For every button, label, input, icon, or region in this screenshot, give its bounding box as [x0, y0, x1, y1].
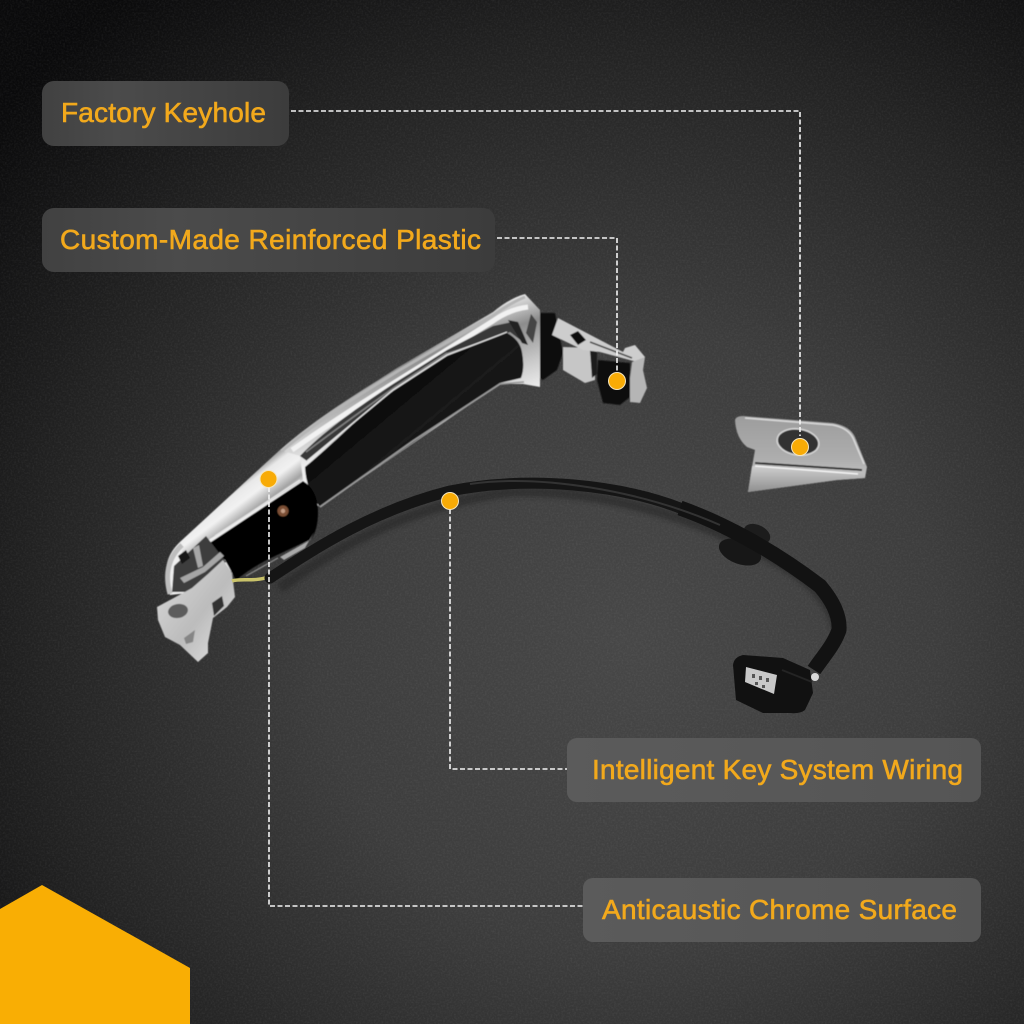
pivot clip chrome — [157, 560, 235, 662]
screw — [278, 506, 288, 516]
black cable — [270, 483, 680, 578]
marker dot: chrome surface — [260, 470, 277, 488]
dashed leader: Factory Keyhole — [291, 111, 800, 436]
callout: Intelligent Key System Wiring — [567, 738, 981, 802]
icon: door handle with chrome surface — [157, 294, 647, 662]
left end chrome ribs — [180, 545, 224, 583]
pocket top edge line — [215, 480, 300, 536]
connector pins — [752, 674, 769, 688]
marker dot: reinforced plastic — [608, 372, 626, 390]
yellow wire — [232, 577, 268, 581]
left end interior — [172, 536, 226, 592]
callout: Anticaustic Chrome Surface — [583, 878, 981, 942]
black cable sleeve — [680, 508, 839, 670]
connector metal clip — [811, 673, 819, 681]
black grip insert — [305, 333, 523, 507]
cover body — [735, 416, 867, 492]
black bezel at right end — [540, 313, 563, 380]
right chrome reflection — [526, 314, 537, 343]
black bracket tab — [597, 360, 630, 405]
chrome bracket block dark slot — [590, 350, 597, 378]
left end dark recess — [178, 550, 190, 564]
cover groove highlight — [755, 466, 858, 474]
pocket lower chrome lip — [280, 532, 314, 560]
callout: Factory Keyhole: Factory Keyhole — [61, 97, 266, 128]
chrome end post — [630, 357, 647, 403]
icon: keyhole cover — [735, 416, 867, 492]
keyhole recess — [775, 426, 821, 458]
pivot clip window — [212, 596, 224, 616]
callout: Anticaustic Chrome Surface: Anticaustic Chrome Surface — [602, 894, 957, 925]
icon: wiring harness — [232, 481, 839, 713]
callout: Custom-Made Reinforced Plastic: Custom-Made Reinforced Plastic — [60, 224, 481, 255]
callout: Factory Keyhole — [42, 81, 289, 146]
black screw pocket — [205, 481, 318, 580]
strip sheen — [306, 353, 447, 452]
grip lower edge — [320, 382, 524, 507]
dashed leader: Anticaustic Chrome Surface — [269, 487, 583, 906]
chrome rim shade — [282, 297, 525, 451]
reflection at grip corner — [508, 320, 528, 345]
pocket lower line — [246, 558, 278, 576]
pivot clip notch — [184, 630, 195, 644]
left end outer rim — [168, 545, 182, 594]
grip top white trim — [307, 332, 507, 461]
connector housing ridge — [782, 670, 812, 682]
callout: Custom-Made Reinforced Plastic — [42, 208, 495, 272]
upper grommet — [741, 520, 773, 548]
connector white terminal block — [745, 667, 777, 694]
corner hexagon accent — [0, 885, 190, 1024]
lower grommet — [715, 533, 765, 571]
cable sheen — [470, 481, 720, 525]
pivot clip hole — [167, 602, 189, 620]
marker dot: wiring — [442, 492, 458, 510]
cover rim light — [745, 418, 864, 464]
chrome bracket top plate — [552, 318, 645, 362]
dark inset strip — [300, 322, 523, 461]
marker dot: keyhole — [792, 438, 808, 456]
chrome handle body — [166, 294, 540, 595]
dashed leader: Intelligent Key System Wiring — [450, 509, 567, 769]
cable shadow — [280, 492, 836, 630]
bracket dark line — [590, 342, 632, 358]
cover lower lip — [748, 466, 865, 492]
chrome bracket block — [563, 347, 595, 383]
bracket slot — [570, 331, 586, 345]
cover groove — [755, 463, 862, 470]
chrome rim highlight — [292, 307, 528, 450]
wide chrome band near pivot — [180, 450, 303, 556]
electrical connector — [733, 655, 813, 713]
dashed leader: Custom-Made Reinforced Plastic — [497, 238, 617, 372]
screw centre — [281, 509, 285, 513]
callout: Intelligent Key System Wiring: Intelligent Key System Wiring — [592, 754, 963, 785]
